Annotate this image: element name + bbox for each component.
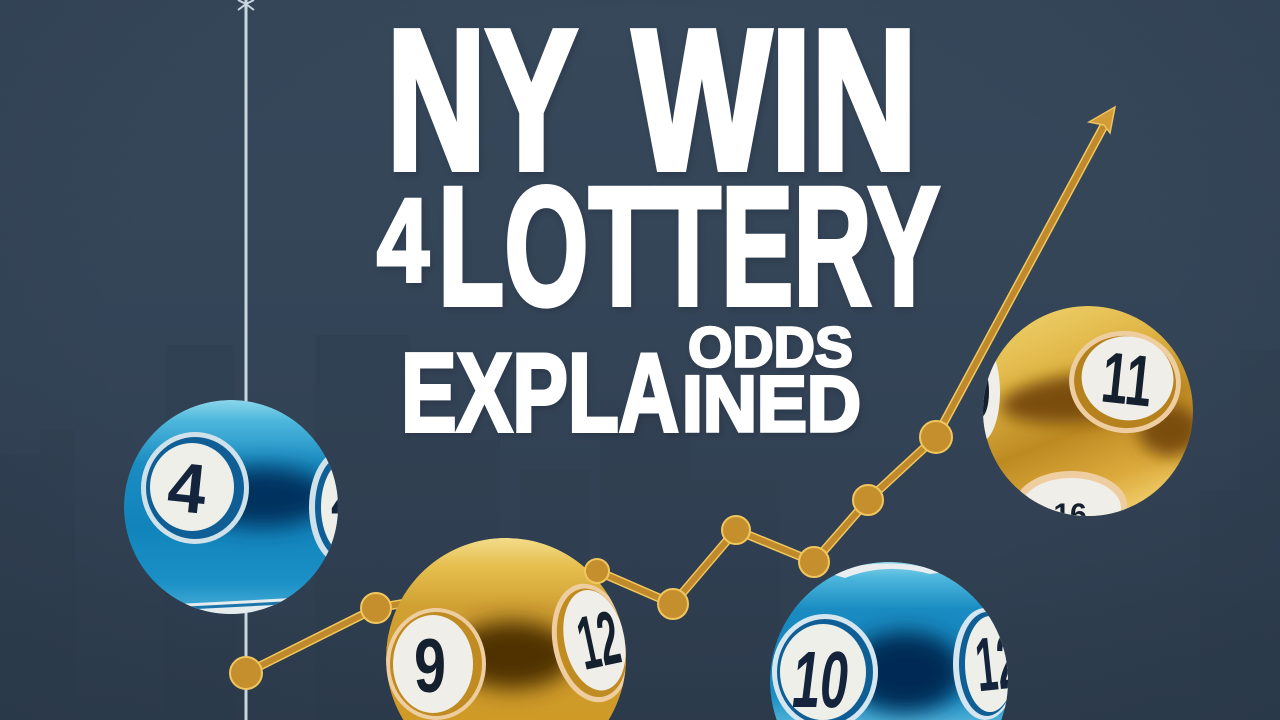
title [377, 0, 940, 455]
bottom number disc [1020, 471, 1127, 516]
top stripe [834, 564, 939, 578]
subtitle word: INED: INED [682, 359, 861, 448]
arrow head [1089, 107, 1115, 133]
number disc 12 [552, 584, 626, 702]
faint city skyline [0, 335, 1280, 720]
subtitle word: EXPLA: EXPLA [401, 331, 679, 455]
vertical axis line with star tip [238, 0, 254, 720]
number disc 11 [1069, 330, 1181, 434]
number disc 4: 4 [164, 447, 210, 529]
chart node on gold ball edge [585, 559, 609, 583]
bottom stripes [184, 598, 287, 614]
number disc 12 side [953, 608, 1008, 720]
number disc 10 [772, 614, 878, 720]
side number disc: 4 [331, 475, 360, 533]
number 11: 11 [1098, 338, 1156, 422]
chart node on blue ball edge [799, 547, 829, 577]
subtitle word: ODDS: ODDS [688, 316, 853, 380]
rising gold line chart [246, 122, 1106, 673]
side number disc [309, 457, 338, 557]
blue ball 4 [124, 400, 338, 614]
number disc 12: 12 [570, 595, 627, 687]
blue ball 10 [770, 562, 1022, 720]
number disc 12 side: 12 [972, 619, 1022, 708]
gold ball 11 [983, 306, 1193, 516]
number disc 9 [386, 608, 486, 720]
number disc 9: 9 [414, 624, 446, 709]
number disc 4 [141, 432, 249, 544]
chart nodes lower [230, 421, 952, 689]
title line: LOTTERY: LOTTERY [438, 152, 940, 340]
bottom number disc: 16 [1053, 498, 1087, 531]
gold ball 9 [386, 538, 641, 720]
title numeral: 4: 4 [377, 175, 429, 307]
side number disc [983, 360, 1000, 439]
